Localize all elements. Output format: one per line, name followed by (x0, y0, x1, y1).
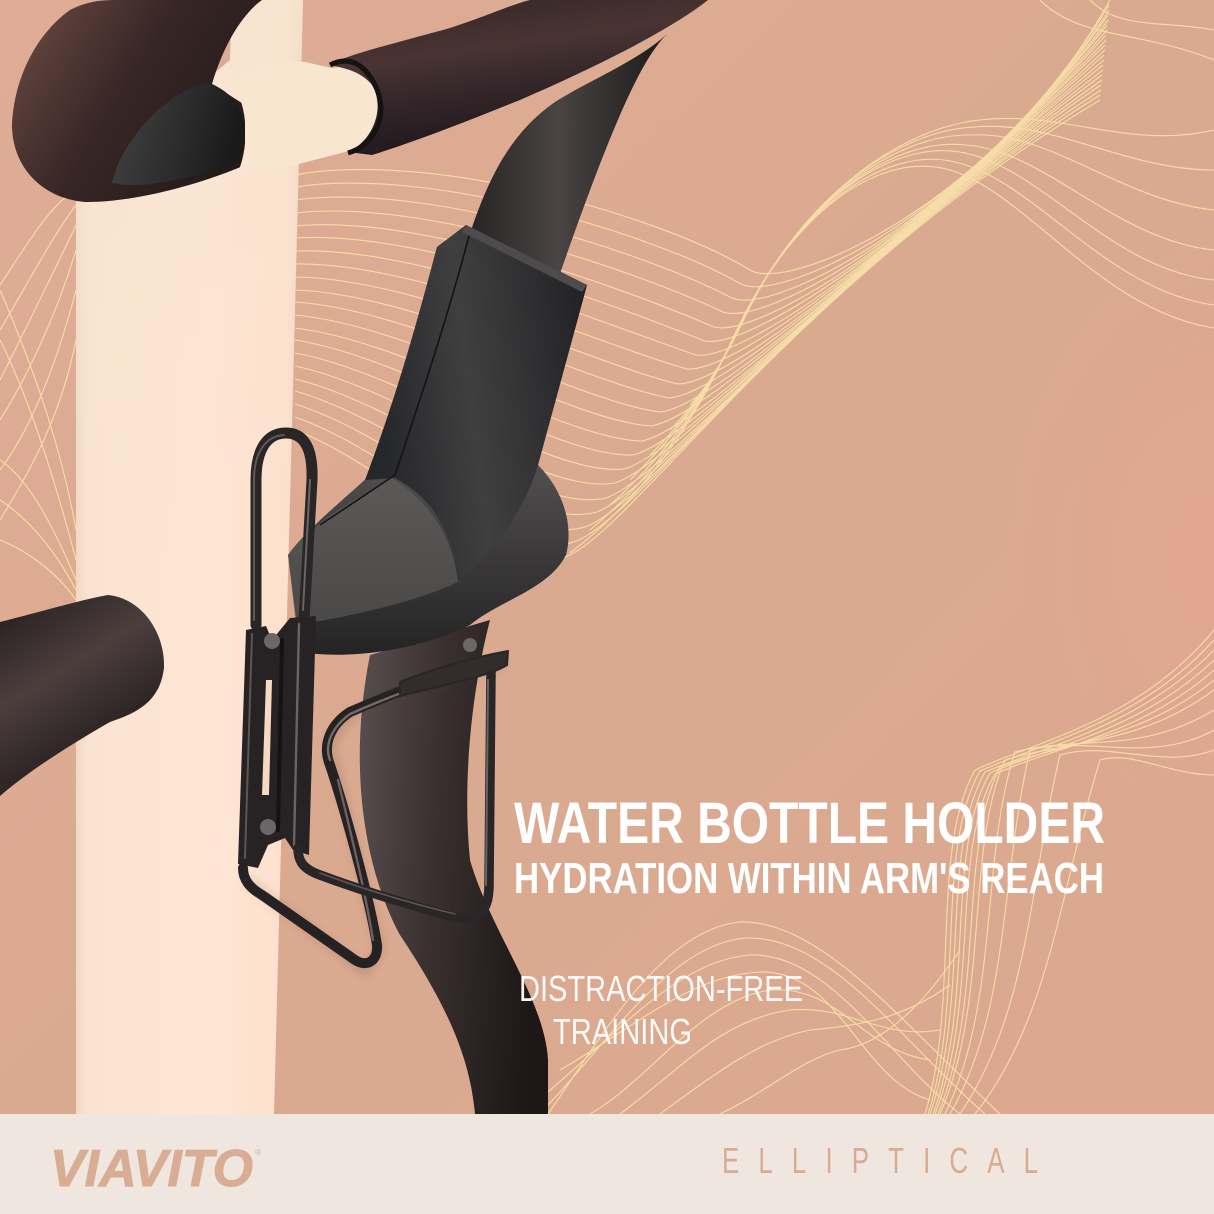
feature text (519, 968, 803, 1052)
feature text: TRAINING (553, 1011, 692, 1052)
left grip lower tube (0, 595, 164, 796)
cage shadow (246, 662, 505, 972)
upper wire loop (256, 433, 312, 625)
photo: elliptical upright with bottle cage (0, 0, 708, 1114)
black sleeve tip (112, 82, 245, 185)
feature text: DISTRACTION-FREE (519, 968, 803, 1009)
wave pattern: bottom band (548, 922, 1000, 1114)
screws (264, 633, 280, 649)
logo: VIAVITO (50, 1140, 253, 1198)
wave pattern: left band (0, 190, 76, 600)
heading: WATER BOTTLE HOLDER (514, 791, 1105, 856)
wave pattern: lower right band (925, 630, 1214, 1114)
lower dark tube (360, 620, 548, 1114)
lower triangle (243, 660, 500, 963)
top of sleeve rim (462, 225, 587, 292)
rail highlights (245, 634, 252, 858)
handlebar grip, right (330, 0, 708, 155)
cream frame post (76, 0, 303, 1114)
slot through mount (262, 680, 272, 795)
right wire arm (298, 672, 491, 918)
wave pattern: upper band (295, 0, 1214, 561)
top-left handlebar (12, 0, 262, 202)
grip collar line (330, 61, 381, 153)
cream tint on upper post (76, 0, 303, 560)
heading (514, 791, 1105, 903)
rail block with left and right rails (238, 616, 316, 868)
top strap (400, 651, 508, 696)
upper dark tube (468, 33, 668, 285)
footer band (0, 1114, 1214, 1214)
product label: ELLIPTICAL (722, 1141, 1038, 1181)
cream connector (232, 61, 382, 172)
bottle cage (238, 433, 508, 963)
hub and sleeve (288, 225, 587, 655)
registered mark: ® (255, 1148, 261, 1157)
sleeve seam (320, 232, 470, 525)
